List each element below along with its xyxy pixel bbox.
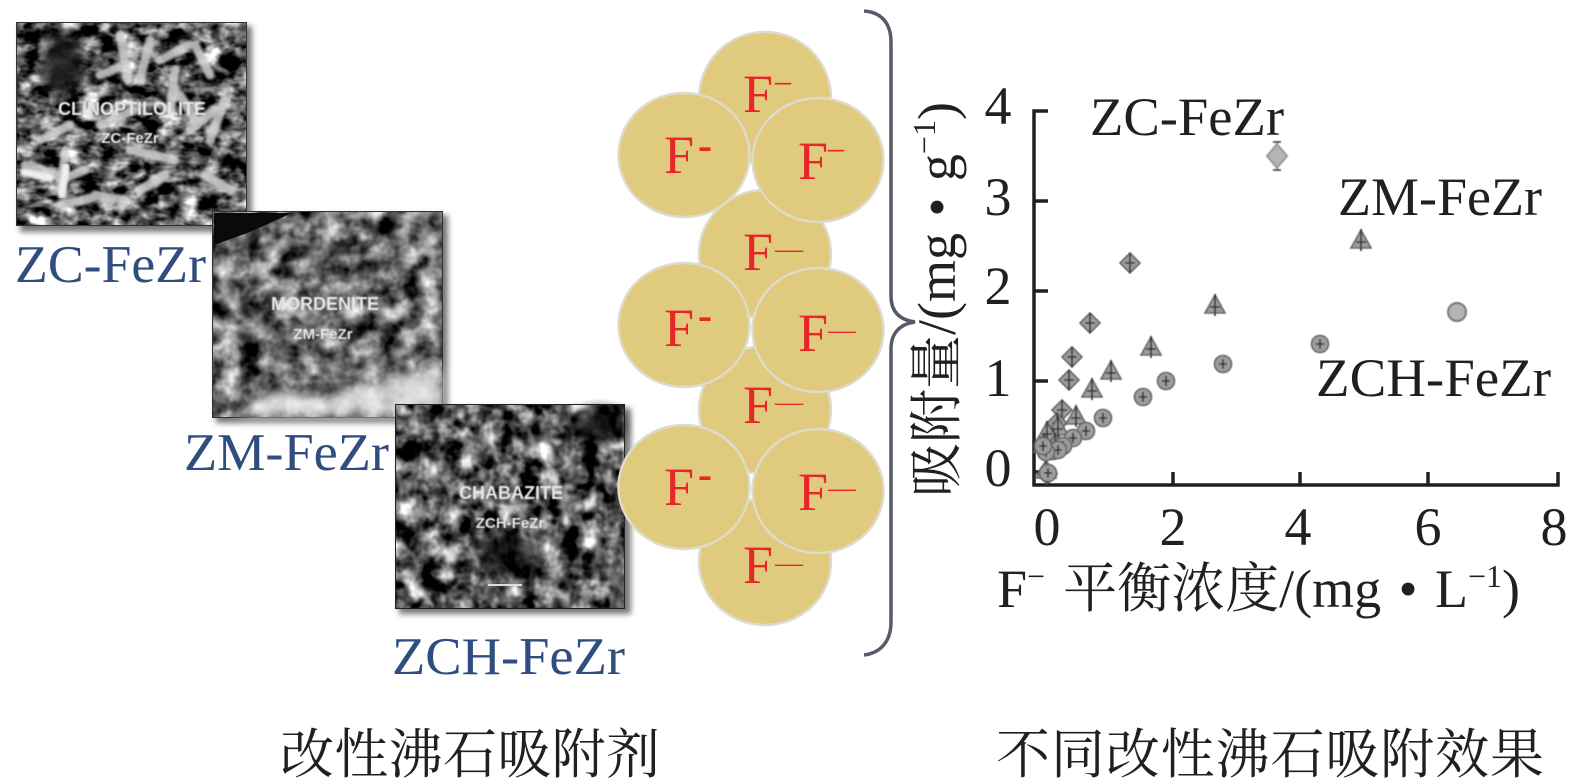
series label: ZM-FeZr: ZM-FeZr (1338, 167, 1542, 227)
label: ZCH-FeZr: ZCH-FeZr (392, 628, 625, 686)
x tick labels: 4 (1284, 497, 1312, 557)
x tick labels (1034, 497, 1568, 557)
text: ZCH-FeZr image caption: ZCH-FeZr (476, 515, 544, 532)
x tick labels: 2 (1160, 497, 1186, 557)
x axis title: 平衡浓度/(mg (1063, 559, 1381, 619)
x axis title: F (997, 559, 1027, 619)
y tick labels: 4 (984, 76, 1012, 136)
x axis title: ) (1502, 559, 1520, 619)
series label: ZCH-FeZr: ZCH-FeZr (1316, 348, 1551, 408)
y axis title: ) (907, 102, 967, 120)
y tick labels: 0 (984, 438, 1012, 498)
x axis title: − (1027, 558, 1045, 594)
diagram: adsorbent spheres with fluoride ions: — (827, 315, 857, 346)
text: chabazite label: CHABAZITE (459, 483, 563, 503)
diagram: adsorbent spheres with fluoride ions: F (664, 298, 694, 358)
diagram: adsorbent spheres with fluoride ions: - (698, 293, 712, 339)
diagram: adsorbent spheres with fluoride ions: - (698, 452, 712, 498)
diagram: adsorbent spheres with fluoride ions: F (798, 462, 828, 522)
image: ZCH-FeZr SEM micrograph (395, 404, 631, 614)
label: ZM-FeZr: ZM-FeZr (184, 424, 389, 482)
image: ZM-FeZr SEM micrograph (212, 211, 448, 423)
series: ZC-FeZr diamonds (1037, 142, 1287, 484)
diagram: adsorbent spheres with fluoride ions: F (798, 131, 828, 191)
y tick labels: 3 (984, 167, 1012, 227)
y tick labels: 2 (984, 256, 1012, 316)
diagram: adsorbent spheres with fluoride ions: F (743, 64, 773, 124)
y axis title: −1 (906, 120, 942, 154)
text: clinoptilolite label: CLINOPTILOLITE (58, 99, 206, 119)
x axis title: −1 (1468, 558, 1502, 594)
diagram: adsorbent spheres with fluoride ions: — (774, 387, 804, 418)
series label: ZC-FeZr: ZC-FeZr (1090, 87, 1284, 147)
diagram: adsorbent spheres with fluoride ions: F (743, 375, 773, 435)
diagram: adsorbent spheres with fluoride ions: F (743, 222, 773, 282)
diagram: adsorbent spheres with fluoride ions: — (774, 548, 804, 579)
y tick labels: 1 (984, 348, 1012, 408)
diagram: adsorbent spheres with fluoride ions: — (827, 473, 857, 504)
x tick labels: 0 (1034, 497, 1060, 557)
label: ZC-FeZr: ZC-FeZr (15, 236, 206, 294)
series: ZM-FeZr triangles (1034, 229, 1371, 481)
x tick labels: 6 (1414, 497, 1442, 557)
y tick labels (984, 76, 1012, 498)
diagram: adsorbent spheres with fluoride ions: — (774, 234, 804, 265)
image: ZC-FeZr SEM micrograph (16, 22, 252, 232)
series: ZCH-FeZr circles (1034, 303, 1466, 482)
diagram: adsorbent spheres with fluoride ions (618, 32, 884, 625)
panel: modified zeolite SEM images (15, 22, 631, 686)
x axis title: • L (1399, 559, 1468, 619)
y axis title: 吸附量/(mg • g (907, 154, 967, 497)
diagram: adsorbent spheres with fluoride ions: – (827, 129, 845, 165)
text: mordenite label: MORDENITE (271, 294, 379, 314)
y axis and ticks (1034, 111, 1558, 485)
diagram: adsorbent spheres with fluoride ions: - (698, 123, 712, 169)
x tick labels: 8 (1540, 497, 1568, 557)
diagram: adsorbent spheres with fluoride ions: F (743, 535, 773, 595)
diagram: adsorbent spheres with fluoride ions: F (798, 303, 828, 363)
diagram: adsorbent spheres with fluoride ions: F (664, 457, 694, 517)
brace connecting adsorbent to chart (864, 11, 915, 655)
chart: adsorption scatter plot (906, 76, 1568, 619)
text: ZM-FeZr image caption: ZM-FeZr (293, 326, 353, 343)
diagram: adsorbent spheres with fluoride ions: – (774, 62, 792, 98)
diagram: adsorbent spheres with fluoride ions: F (664, 125, 694, 185)
text: ZC-FeZr image caption: ZC-FeZr (101, 130, 159, 147)
